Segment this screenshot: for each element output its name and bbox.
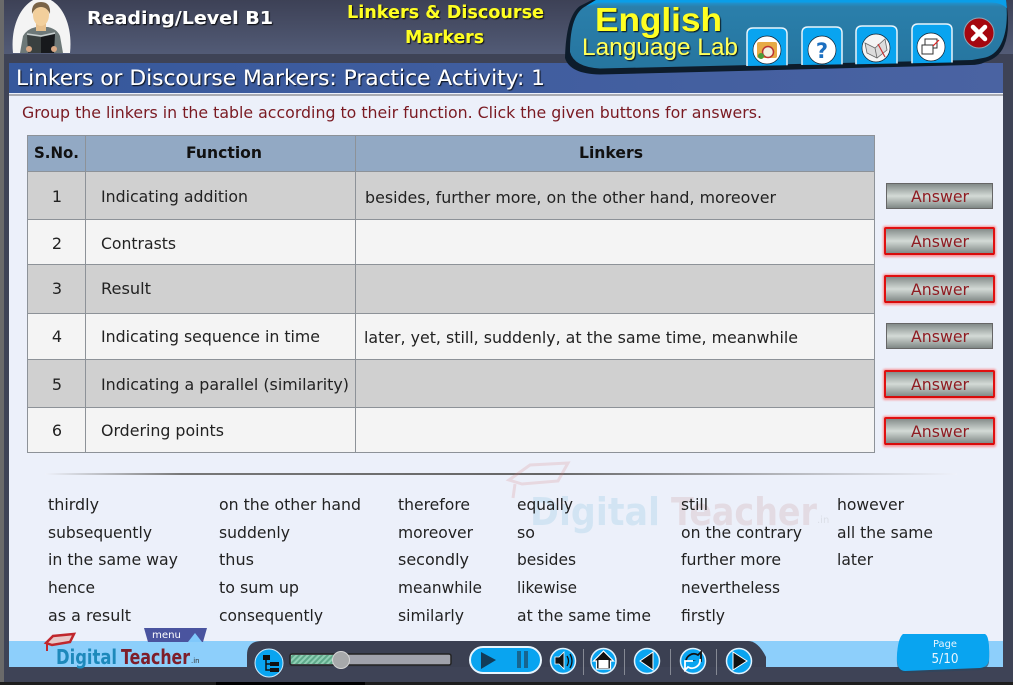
- function column: Contrasts: [101, 234, 176, 253]
- word bank: likewise: [517, 578, 577, 597]
- function column: Ordering points: [101, 421, 224, 440]
- table header: Function: [186, 143, 262, 162]
- logo subtitle: Language Lab: [582, 34, 738, 61]
- word bank: similarly: [398, 606, 464, 625]
- word bank: however: [837, 495, 904, 514]
- function column: Result: [101, 279, 151, 298]
- topic heading: Linkers & Discourse: [347, 3, 544, 23]
- icon: tab help: [802, 27, 842, 65]
- page counter: Page: [933, 639, 957, 650]
- answer buttons: [883, 184, 996, 447]
- bottom edge: [0, 682, 1013, 685]
- answer button 2: [883, 226, 996, 257]
- row numbers: 6: [52, 421, 62, 440]
- page counter: 5/10: [932, 652, 958, 667]
- function column: Indicating a parallel (similarity): [101, 375, 349, 394]
- icon: next: [726, 648, 752, 674]
- word bank: [48, 495, 933, 625]
- header band: [0, 0, 1013, 54]
- word bank: suddenly: [219, 523, 290, 542]
- icon: close button: [964, 18, 994, 48]
- word bank: consequently: [219, 606, 323, 625]
- linkers column: later, yet, still, suddenly, at the same time, meanwhile: [364, 328, 798, 347]
- icon: volume: [550, 648, 576, 674]
- row numbers: 5: [52, 375, 62, 394]
- answer button 1: Answer: [911, 187, 969, 206]
- answer button 3: Answer: [911, 280, 969, 299]
- icon: previous: [634, 648, 660, 674]
- activity title: Linkers or Discourse Markers: Practice Activity: 1: [16, 66, 545, 90]
- answer button 4: [886, 324, 992, 348]
- menu tab: menu: [152, 630, 181, 641]
- word bank: thus: [219, 550, 254, 569]
- answer button 3: [883, 274, 996, 305]
- linkers column: besides, further more, on the other hand, moreover: [365, 188, 776, 207]
- word bank: equally: [517, 495, 573, 514]
- watermark: .in: [817, 515, 829, 526]
- table header: S.No.: [34, 143, 79, 162]
- play and pause buttons: [470, 647, 541, 673]
- word bank: meanwhile: [398, 578, 482, 597]
- row numbers: 3: [52, 279, 62, 298]
- word bank: hence: [48, 578, 95, 597]
- word bank: still: [681, 495, 708, 514]
- answer button 2: Answer: [911, 232, 969, 251]
- icon: reload: [680, 648, 706, 674]
- word bank: besides: [517, 550, 576, 569]
- word bank: to sum up: [219, 578, 299, 597]
- menu tab: [144, 628, 207, 642]
- answer button 6: [883, 416, 996, 447]
- answer button 5: [883, 369, 996, 400]
- topic heading: [347, 3, 544, 48]
- logo: Digital Teacher: .in: [191, 657, 200, 665]
- logo: Digital Teacher: Teacher: [121, 645, 190, 669]
- progress slider: [290, 652, 451, 668]
- logo title: English: [595, 1, 722, 38]
- watermark: Teacher: [671, 490, 817, 534]
- instructions: Group the linkers in the table according to their function. Click the given buttons for answers.: [22, 103, 762, 122]
- row numbers: 2: [52, 234, 62, 253]
- function column: [101, 187, 349, 440]
- word bank: subsequently: [48, 523, 152, 542]
- page counter: [897, 634, 989, 673]
- word bank: moreover: [398, 523, 473, 542]
- word bank: thirdly: [48, 495, 99, 514]
- word bank: secondly: [398, 550, 469, 569]
- word bank: later: [837, 550, 873, 569]
- panel: title bar: [9, 63, 1003, 93]
- word bank: further more: [681, 550, 781, 569]
- answer button 1: [886, 184, 992, 208]
- word bank: firstly: [681, 606, 725, 625]
- word bank: on the other hand: [219, 495, 361, 514]
- word bank: on the contrary: [681, 523, 802, 542]
- icon: tab book: [856, 26, 897, 64]
- linkers column: [364, 188, 798, 347]
- icon: tab folder: [747, 28, 787, 66]
- word bank: so: [517, 523, 535, 542]
- answer button 4: Answer: [911, 327, 969, 346]
- icon: tab windows: [912, 24, 952, 63]
- table: [27, 135, 875, 453]
- row numbers: 4: [52, 327, 62, 346]
- word bank: as a result: [48, 606, 131, 625]
- answer button 5: Answer: [911, 375, 969, 394]
- level heading: Reading/Level B1: [87, 8, 273, 29]
- table header: [34, 143, 643, 162]
- icon: tab help: ?: [816, 39, 828, 63]
- word bank: at the same time: [517, 606, 651, 625]
- word bank: nevertheless: [681, 578, 780, 597]
- word bank: therefore: [398, 495, 470, 514]
- logo: Digital Teacher: Digital: [56, 645, 117, 669]
- icon: home: [591, 648, 616, 674]
- watermark: Digital: [530, 490, 660, 534]
- function column: Indicating sequence in time: [101, 327, 320, 346]
- word bank: all the same: [837, 523, 933, 542]
- icon: reader avatar: [13, 0, 70, 53]
- function column: Indicating addition: [101, 187, 248, 206]
- logo: Digital Teacher: [46, 634, 200, 669]
- row numbers: 1: [52, 187, 62, 206]
- watermark: [509, 463, 829, 534]
- table header: Linkers: [579, 143, 643, 162]
- panel: media control bar: [247, 641, 766, 667]
- row numbers: [52, 187, 62, 440]
- panel: English Language Lab logo: [565, 0, 1008, 74]
- icon: outline button: [255, 649, 283, 677]
- panel: footer strip: [9, 641, 1003, 667]
- answer button 6: Answer: [911, 422, 969, 441]
- topic heading: Markers: [405, 28, 484, 48]
- word bank: in the same way: [48, 550, 178, 569]
- panel: content area: [9, 93, 1003, 641]
